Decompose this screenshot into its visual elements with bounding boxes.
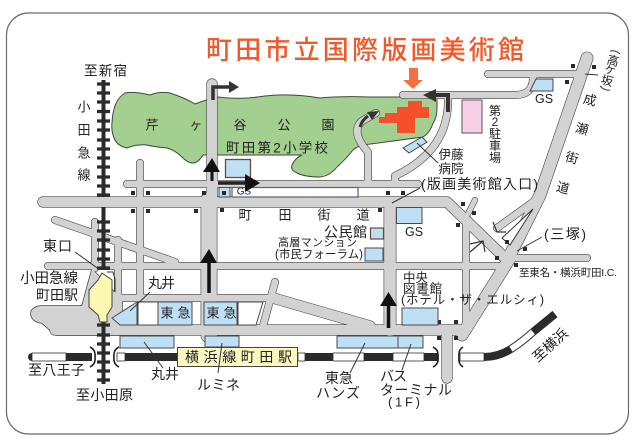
parking label <box>489 104 501 165</box>
Yokohama line east <box>298 353 484 361</box>
Tokyu Hands label <box>316 370 360 401</box>
Naruse road label <box>555 91 598 197</box>
school label: 町田第2小学校 <box>226 140 328 156</box>
Tokyu building east: 急 <box>223 306 237 320</box>
Mitsuzuka leader <box>517 237 542 251</box>
Marui label, south: 丸井 <box>151 366 179 382</box>
library building <box>402 308 438 325</box>
Marui label, north: 丸井 <box>148 275 175 291</box>
Ogasaka label: 高 <box>605 53 621 69</box>
Odakyu line vertical label: 線 <box>77 168 91 182</box>
dark arrow to museum entrance <box>423 89 448 112</box>
Tokyu building east: 東 <box>206 306 220 320</box>
Tokyu Hands label: 東急 <box>325 370 353 386</box>
Machida Kaido label: 道 <box>356 208 370 222</box>
Odakyu Machida station label: 小田急線 <box>20 270 78 287</box>
community centre building <box>370 228 384 239</box>
parking label: 駐 <box>489 126 501 141</box>
Odakyu line vertical label: 田 <box>77 122 91 138</box>
Marui leader, north <box>130 292 150 311</box>
Ogasaka label: 坂 <box>599 73 615 89</box>
park label: 谷 <box>233 118 247 132</box>
ramp arrow marks <box>470 222 506 252</box>
east exit label: 東口 <box>43 238 72 254</box>
white shop block <box>138 302 158 325</box>
Tokyu building west <box>158 302 192 325</box>
park: Serigaya park <box>112 92 437 177</box>
Naruse road label: 成 <box>582 91 598 109</box>
arrow north, central road <box>200 249 217 293</box>
arrow north, east road <box>380 292 397 328</box>
Lumine building <box>205 336 239 347</box>
bus terminal label: バス <box>380 368 407 384</box>
Marui leader, south <box>144 342 163 368</box>
GS label, top right: GS <box>535 92 553 106</box>
to Odawara label: 至小田原 <box>76 387 133 403</box>
bus terminal label <box>380 368 452 410</box>
bus terminal label: (1F) <box>388 394 420 410</box>
east exit leader <box>75 252 100 270</box>
dark arrow on park road <box>360 111 379 127</box>
Odakyu line vertical label: 小 <box>77 100 91 114</box>
Tokyu Hands building <box>337 336 398 348</box>
Tokyu Hands leader <box>350 343 365 373</box>
Odakyu railway, north <box>97 80 110 197</box>
library labels: 図書館 <box>403 282 442 296</box>
arrow east on upper road <box>218 174 260 192</box>
bus terminal leader <box>402 344 411 370</box>
library labels: 中央 <box>403 270 428 285</box>
park label: ヶ <box>189 118 203 132</box>
community centre label: 公民館 <box>324 224 367 240</box>
citizens forum building <box>365 248 383 261</box>
Machida Kaido label <box>238 208 370 222</box>
title: 町田市立国際版画美術館 <box>206 35 524 65</box>
hotel label: (ホテル・ザ・エルシィ) <box>401 293 544 307</box>
Odakyu line vertical label: 急 <box>77 146 91 160</box>
Tokyu Hands label: ハンズ <box>316 385 360 401</box>
Lumine label: ルミネ <box>197 377 240 393</box>
park label: 公 <box>277 118 291 132</box>
road network <box>31 58 587 378</box>
parking label: 車 <box>489 139 501 153</box>
Yokohama line west <box>28 353 179 361</box>
Ito hospital building <box>403 137 427 153</box>
GS strip below school <box>232 188 358 197</box>
park label <box>145 118 335 132</box>
Tokyu building east <box>204 302 237 325</box>
Naruse road label: 道 <box>555 179 571 197</box>
orange arrow to museum <box>403 68 423 89</box>
hospital label: 病院 <box>438 162 464 176</box>
Tokyu building west: 急 <box>177 306 191 320</box>
to Hachioji label: 至八王子 <box>28 362 85 378</box>
Machida Kaido label: 町 <box>238 208 252 222</box>
GS block building <box>396 208 422 224</box>
Mitsuzuka label: (三塚) <box>544 226 586 242</box>
to Shinjuku label: 至新宿 <box>84 64 127 78</box>
arrow turning east, top of school road <box>213 81 239 100</box>
petrol station, top right <box>530 79 553 91</box>
bus terminal building <box>398 336 423 348</box>
Machida Kaido label: 街 <box>317 208 331 222</box>
high-rise mansion label: 高層マンション <box>278 235 357 249</box>
Odakyu Machida station label: 町田駅 <box>36 287 78 303</box>
hospital label <box>438 148 464 176</box>
Yokohama line curve <box>484 314 555 357</box>
ramp island <box>502 209 533 245</box>
road casings <box>31 58 587 378</box>
Odakyu Machida station label <box>20 270 78 303</box>
arrow north at school road <box>203 158 220 181</box>
parking lot 2 <box>462 100 482 133</box>
entrance leader <box>392 188 420 203</box>
block beside station <box>107 272 115 292</box>
Tomei interchange label: 至東名・横浜町田I.C. <box>519 266 617 279</box>
Machida Kaido label: 田 <box>278 208 292 222</box>
white block next to Tokyu <box>238 302 263 325</box>
museum entrance label: (版画美術館入口) <box>421 176 538 192</box>
parking label: 場 <box>489 151 501 165</box>
Naruse road label: 瀬 <box>574 120 590 138</box>
Odakyu railway, central <box>97 207 110 270</box>
hospital label: 伊藤 <box>438 148 464 162</box>
library labels <box>403 270 442 296</box>
rail crossing brackets <box>90 347 463 367</box>
junction markers <box>131 64 596 340</box>
parking label: 第 <box>489 104 501 118</box>
park label: 園 <box>321 118 335 132</box>
small petrol station block <box>219 188 230 197</box>
road fills <box>31 58 587 378</box>
school building <box>226 160 250 178</box>
Ogasaka label: ケ <box>603 63 617 78</box>
citizens forum label: (市民フォーラム) <box>275 248 363 261</box>
GS label, central: GS <box>405 225 423 239</box>
bus terminal label: ターミナル <box>380 382 452 398</box>
Yokohama line Machida station label: 横浜線町田駅 <box>185 349 292 365</box>
Odakyu line vertical label <box>77 100 91 182</box>
museum building <box>379 101 429 133</box>
Naruse road label: 街 <box>564 149 580 167</box>
Tokyu building west: 東 <box>160 306 174 320</box>
Marui south building <box>120 336 174 348</box>
Lumine leader <box>218 343 222 373</box>
parking label: 2 <box>492 115 499 129</box>
Marui triangle building <box>112 302 137 325</box>
Ogasaka label <box>585 51 621 90</box>
to Yokohama label: 至横浜 <box>529 325 571 365</box>
hospital leader <box>417 143 438 163</box>
GS label, strip: GS <box>237 186 252 198</box>
Odakyu Machida station <box>89 273 112 322</box>
park label: 芹 <box>145 118 159 132</box>
Odakyu railway, south <box>97 322 110 384</box>
